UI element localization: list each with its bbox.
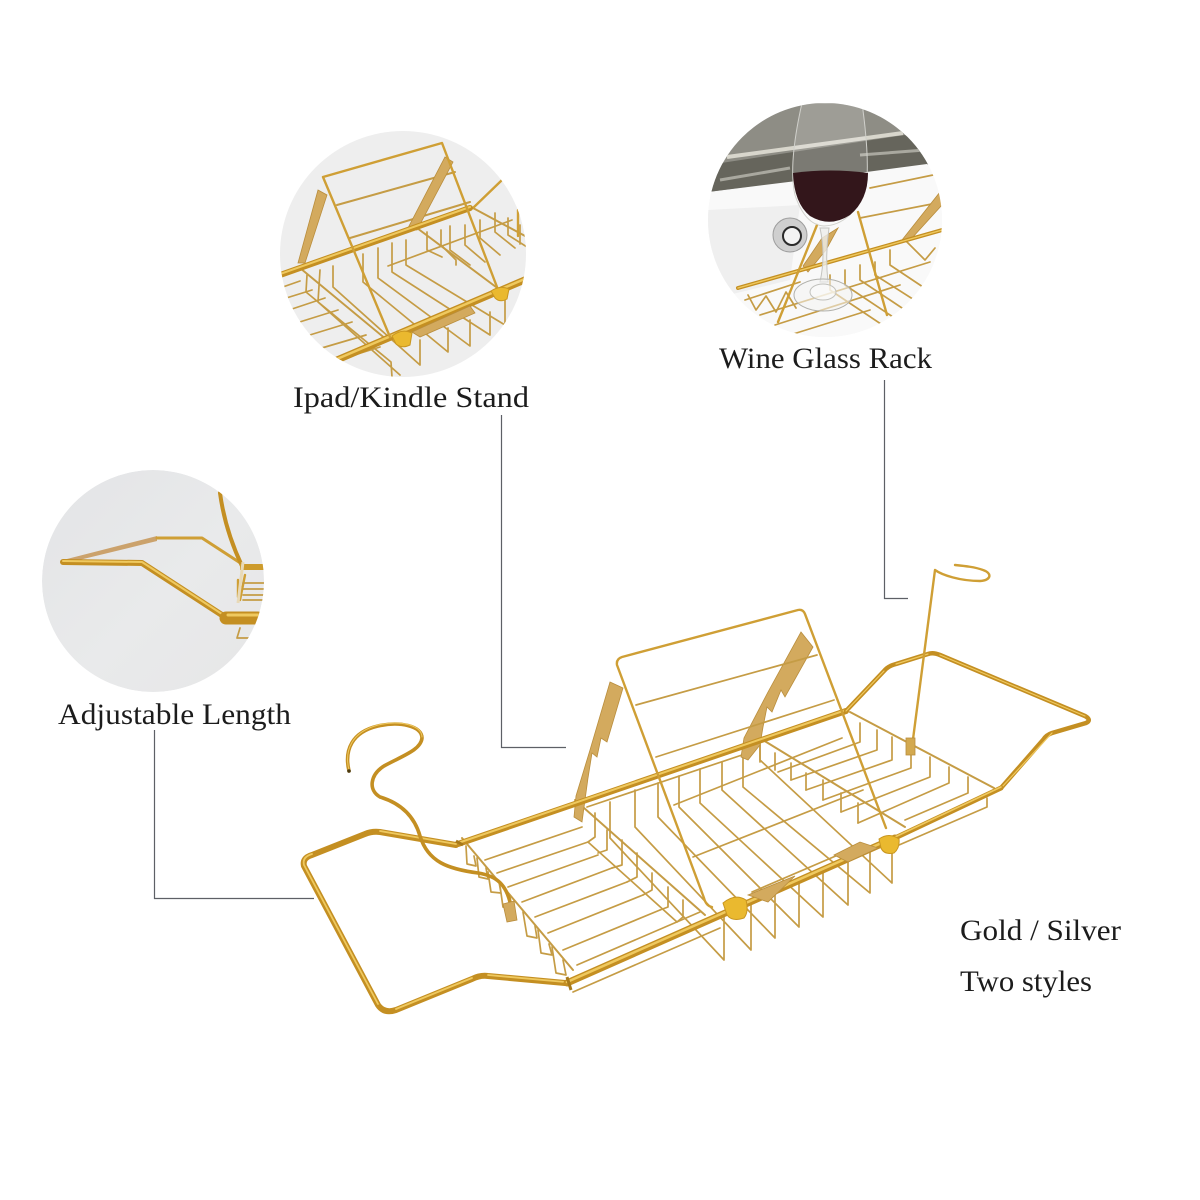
icon: drain — [773, 218, 807, 252]
leader line: wine glass rack — [884, 380, 908, 598]
stand arm: right — [741, 632, 813, 760]
roller: right — [879, 836, 899, 853]
panel: wine glass rack circle — [708, 103, 942, 337]
infographic canvas — [42, 103, 1121, 1014]
right handle — [846, 653, 1089, 788]
back bar — [458, 710, 846, 844]
leader line: adjustable length — [154, 730, 314, 898]
right basket wires — [760, 712, 994, 845]
stand frame — [617, 610, 886, 907]
sliding plate: left — [748, 876, 795, 902]
note: colours and styles: Two styles — [960, 965, 1092, 998]
sliding plate: right — [834, 842, 878, 862]
note: colours and styles — [960, 914, 1121, 998]
soap hook — [347, 723, 510, 902]
left handle — [304, 831, 565, 1011]
label: ipad/kindle stand: Ipad/Kindle Stand — [293, 381, 529, 414]
middle basket wires — [573, 738, 892, 992]
wine holder — [906, 565, 989, 755]
note: colours and styles: Gold / Silver — [960, 914, 1121, 947]
roller: left — [723, 897, 747, 919]
icon: wine glass — [793, 103, 868, 311]
leader line: ipad stand — [502, 415, 566, 748]
main product: gold bath caddy — [304, 565, 1089, 1011]
panel: ipad/kindle stand circle — [280, 131, 527, 377]
left basket wires — [462, 813, 683, 975]
front bar — [567, 787, 1001, 983]
stand back wires — [636, 655, 834, 757]
stand arm: left — [574, 682, 623, 822]
panel: adjustable length circle — [42, 470, 264, 692]
label: adjustable length: Adjustable Length — [58, 698, 291, 731]
hook bracket — [503, 901, 517, 922]
bar end caps — [456, 841, 571, 990]
label: wine glass rack: Wine Glass Rack — [719, 342, 932, 375]
